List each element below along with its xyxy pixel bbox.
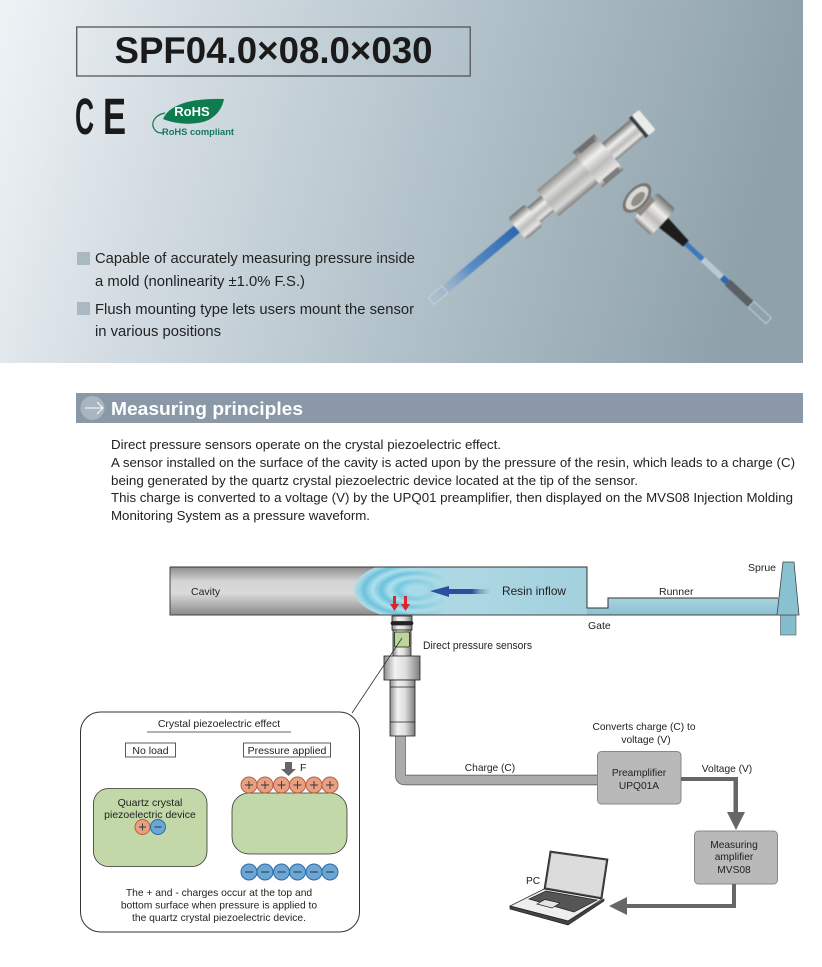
diagram: mold cavity: Sprue: [748, 562, 776, 574]
text: explanation: Direct pressure sensors operate on the crystal piezoelectric effect.: [111, 438, 501, 452]
arrow: resin inflow: [430, 586, 490, 597]
box: measuring amplifier: [694, 831, 778, 884]
label: converts: Converts charge (C) to: [592, 722, 696, 733]
box: measuring amplifier: MVS08: [717, 865, 751, 876]
diagram: sensor: [384, 616, 420, 736]
image: pressure sensor: [416, 102, 662, 319]
icon: laptop: [510, 851, 608, 925]
panel: crystal piezoelectric effect: [80, 638, 402, 932]
icon: CE mark: C: [75, 88, 94, 145]
icon: RoHS logo: RoHS: [174, 104, 210, 119]
label: PC: PC: [526, 876, 540, 887]
icon: CE mark: E: [103, 90, 126, 146]
arrow: voltage: [681, 777, 745, 830]
text: explanation: A sensor installed on the surface of the cavity is acted upon by the pressure of the resin, which leads to a charge (C): [111, 456, 795, 470]
diagram: mold cavity: Runner: [659, 586, 694, 598]
label: sensors: Direct pressure sensors: [423, 640, 532, 652]
text: explanation: Monitoring System as a pressure waveform.: [111, 509, 370, 523]
text: feature bullets: Flush mounting type lets users mount the sensor: [95, 302, 414, 318]
label: converts: [592, 722, 696, 746]
title: model name: [77, 27, 470, 76]
callout line: [352, 638, 402, 713]
text: caption: [121, 888, 317, 924]
text: feature bullets: Capable of accurately measuring pressure inside: [95, 251, 415, 267]
state: no load: [94, 743, 207, 866]
diagram: mold cavity: Resin inflow: [502, 584, 566, 598]
title: model name: SPF04.0×08.0×030: [114, 30, 432, 71]
icon: RoHS logo: RoHS compliant: [162, 126, 234, 137]
text: feature bullets: [77, 251, 415, 340]
text: feature bullets: a mold (nonlinearity ±1.0% F.S.): [95, 274, 305, 290]
icon: CE mark: [75, 88, 126, 146]
state: no load: piezoelectric device: [104, 809, 196, 821]
resin flow front: [354, 568, 587, 614]
diagram: mold cavity: Gate: [588, 620, 611, 632]
runner and gate: [587, 598, 780, 615]
diagram: mold cavity: Cavity: [191, 586, 221, 598]
text: feature bullets: in various positions: [95, 324, 221, 340]
state: no load: Quartz crystal: [118, 797, 182, 809]
state: pressure applied: [232, 743, 347, 880]
box: measuring amplifier: amplifier: [715, 852, 754, 863]
icon: arrow circle: [80, 396, 104, 420]
state: pressure applied: F: [300, 762, 306, 774]
sprue: [777, 562, 799, 635]
text: explanation: being generated by the quartz crystal piezoelectric device located at the tip of the sensor.: [111, 474, 638, 488]
diagram: mold cavity: [170, 560, 799, 635]
panel: product header: [0, 0, 803, 363]
text: caption: bottom surface when pressure is applied to: [121, 900, 317, 912]
text: caption: the quartz crystal piezoelectric device.: [132, 913, 306, 924]
image: BNC connector cable: [617, 178, 781, 334]
label: charge: Charge (C): [465, 763, 515, 774]
icon: RoHS logo: [153, 99, 234, 137]
cable: charge: [400, 736, 600, 780]
arrow: to PC: [609, 884, 736, 915]
box: preamplifier: [598, 752, 681, 804]
arrows: pressure: [390, 596, 410, 611]
box: preamplifier: Preamplifier: [612, 768, 667, 779]
heading: Measuring principles: [76, 393, 803, 423]
label: voltage: Voltage (V): [702, 764, 752, 775]
state: no load: No load: [132, 745, 169, 757]
box: preamplifier: UPQ01A: [619, 781, 659, 792]
panel: crystal piezoelectric effect: Crystal piezoelectric effect: [158, 718, 280, 730]
state: pressure applied: Pressure applied: [248, 745, 327, 757]
heading: Measuring principles: Measuring principles: [111, 398, 303, 419]
text: explanation: [111, 438, 795, 523]
box: measuring amplifier: Measuring: [710, 840, 758, 851]
text: explanation: This charge is converted to a voltage (V) by the UPQ01 preamplifier, then displayed on the MVS08 Injection Molding: [111, 491, 793, 505]
text: caption: The + and - charges occur at the top and: [126, 888, 312, 899]
label: converts: voltage (V): [621, 735, 671, 746]
